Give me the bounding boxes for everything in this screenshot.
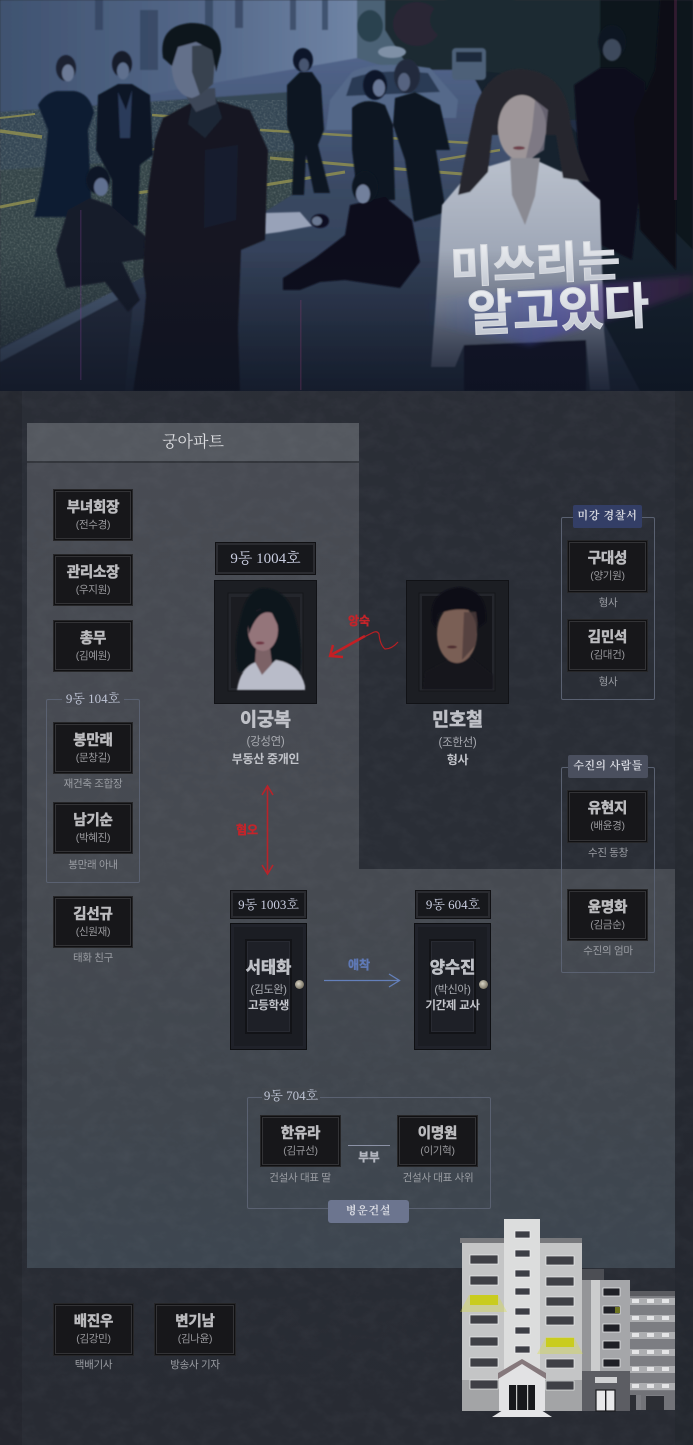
caption: 태화 친구: 태화 친구 bbox=[73, 952, 113, 964]
role: 형사: 형사 bbox=[447, 753, 468, 767]
group label: 수진의 사람들: 수진의 사람들 bbox=[573, 760, 643, 772]
name card: 김민석: 김민석 bbox=[588, 630, 627, 646]
relation label: 앙숙: 앙숙 bbox=[348, 614, 370, 628]
group box: 9동 704호 bbox=[247, 1097, 491, 1209]
name card: 배진우: (김강민) bbox=[76, 1333, 111, 1345]
name card: 봉만래: (문창길) bbox=[76, 752, 110, 764]
portrait frame: 민호철 bbox=[406, 580, 509, 704]
actor name: 박신아: (박신아) bbox=[434, 984, 471, 996]
door: 서태화 bbox=[230, 923, 307, 1050]
company label: 병운건설 bbox=[328, 1200, 409, 1223]
name card: 변기남: (김나윤) bbox=[178, 1333, 212, 1345]
character name: 이궁복: 이궁복 bbox=[240, 709, 291, 730]
name card: 김선규: 김선규 bbox=[73, 907, 113, 923]
room plate: 9동 604호: 9동 604호 bbox=[426, 897, 480, 912]
group box: 미강 경찰서 bbox=[561, 517, 655, 700]
car bbox=[326, 46, 486, 130]
room plate: 9동 1003호 bbox=[230, 890, 307, 919]
name card: 이명원: (이기혁) bbox=[420, 1145, 455, 1157]
caption: 재건축 조합장: 재건축 조합장 bbox=[64, 778, 122, 790]
room plate: 9동 1003호: 9동 1003호 bbox=[238, 897, 299, 912]
name card: 남기순 bbox=[53, 802, 133, 854]
group label: 9동 104호: 9동 104호 bbox=[66, 691, 120, 706]
name card: 총무 bbox=[53, 620, 133, 672]
name card: 구대성: 구대성 bbox=[588, 551, 627, 567]
group label: 미강 경찰서: 미강 경찰서 bbox=[577, 510, 638, 522]
grass speckle bbox=[0, 100, 300, 360]
caption: 형사: 형사 bbox=[599, 597, 617, 609]
actor name: 조한선: (조한선) bbox=[439, 737, 476, 749]
door: 양수진 bbox=[414, 923, 491, 1050]
actor name: 김도완: (김도완) bbox=[250, 984, 287, 996]
group box: 수진의 사람들 bbox=[561, 767, 655, 973]
name card: 부녀회장: 부녀회장 bbox=[67, 500, 119, 516]
name card: 구대성 bbox=[567, 540, 648, 593]
caption: 건설사 대표 사위: 건설사 대표 사위 bbox=[403, 1172, 473, 1184]
name card: 변기남: 변기남 bbox=[175, 1314, 215, 1330]
apartment building illustration bbox=[460, 1219, 675, 1417]
red double arrow: 혐오 bbox=[261, 784, 274, 876]
couple line bbox=[348, 1145, 390, 1146]
name card: 배진우 bbox=[53, 1303, 134, 1356]
name card: 한유라: 한유라 bbox=[281, 1126, 320, 1142]
character name: 양수진: 양수진 bbox=[430, 959, 475, 977]
name card: 김선규 bbox=[53, 896, 133, 948]
group label: 미강 경찰서 bbox=[573, 505, 642, 528]
police tape bbox=[0, 114, 500, 207]
name card: 배진우: 배진우 bbox=[74, 1314, 113, 1330]
blue arrow: 애착 bbox=[324, 974, 400, 988]
glitch lines and bottom shade bbox=[0, 0, 693, 391]
name card: 총무: 총무 bbox=[80, 631, 106, 647]
room plate: 9동 1004호: 9동 1004호 bbox=[230, 551, 301, 567]
caption: 수진의 엄마: 수진의 엄마 bbox=[583, 945, 633, 957]
name card: 김민석 bbox=[567, 619, 648, 672]
name card: 이명원: 이명원 bbox=[418, 1126, 457, 1142]
name card: 봉만래: 봉만래 bbox=[73, 733, 113, 749]
name card: 봉만래 bbox=[53, 722, 133, 774]
name card: 윤명화: 윤명화 bbox=[588, 900, 627, 916]
panel heading: 궁아파트: 궁아파트 bbox=[162, 434, 224, 451]
name card: 관리소장: 관리소장 bbox=[67, 565, 119, 581]
name card: 부녀회장 bbox=[53, 489, 133, 541]
name card: 유현지 bbox=[567, 790, 648, 843]
lead woman bbox=[431, 69, 610, 391]
red arrow: 앙숙 bbox=[328, 631, 398, 658]
name card: 관리소장 bbox=[53, 554, 133, 606]
drama title logo bbox=[425, 237, 693, 345]
drama title logo: 미쓰리는 bbox=[449, 237, 621, 293]
name card: 구대성: (양기원) bbox=[590, 570, 625, 582]
drama title logo: 알고있다 bbox=[466, 280, 650, 342]
lead man bbox=[133, 23, 268, 391]
name card: 이명원 bbox=[397, 1115, 478, 1167]
hero poster illustration bbox=[0, 0, 693, 391]
company label: 병운건설: 병운건설 bbox=[346, 1205, 391, 1217]
character name: 서태화: 서태화 bbox=[246, 959, 291, 977]
name card: 변기남 bbox=[154, 1303, 236, 1356]
relation label: 애착: 애착 bbox=[348, 958, 370, 972]
name card: 김민석: (김대건) bbox=[590, 649, 625, 661]
portrait frame: 이궁복 bbox=[214, 580, 317, 704]
room plate: 9동 1004호 bbox=[215, 542, 316, 575]
background faces bbox=[56, 25, 626, 228]
name card: 부녀회장: (전수경) bbox=[76, 519, 110, 531]
name card: 김선규: (신원재) bbox=[76, 926, 110, 938]
character name: 민호철: 민호철 bbox=[432, 709, 483, 730]
name card: 남기순: (박혜진) bbox=[76, 832, 110, 844]
name card: 유현지: 유현지 bbox=[588, 801, 627, 817]
role: 고등학생: 고등학생 bbox=[248, 1000, 289, 1012]
group box: 9동 104호 bbox=[46, 699, 140, 883]
actor name: 강성연: (강성연) bbox=[247, 736, 284, 748]
caption: 건설사 대표 딸: 건설사 대표 딸 bbox=[269, 1172, 331, 1184]
caption: 형사: 형사 bbox=[599, 676, 617, 688]
role: 부동산 중개인: 부동산 중개인 bbox=[232, 752, 299, 766]
backdrop bbox=[0, 0, 693, 391]
relation label: 혐오: 혐오 bbox=[236, 823, 258, 837]
caption: 수진 동창: 수진 동창 bbox=[588, 847, 628, 859]
name card: 윤명화: (김금순) bbox=[590, 919, 625, 931]
name card: 윤명화 bbox=[567, 889, 648, 941]
caption: 봉만래 아내: 봉만래 아내 bbox=[68, 859, 118, 871]
caption: 방송사 기자: 방송사 기자 bbox=[170, 1359, 220, 1371]
name card: 유현지: (배윤경) bbox=[590, 820, 625, 832]
caption: 택배기사: 택배기사 bbox=[75, 1359, 112, 1371]
group label: 9동 704호: 9동 704호 bbox=[264, 1088, 318, 1103]
background figures bbox=[34, 0, 676, 312]
role: 기간제 교사: 기간제 교사 bbox=[425, 1000, 480, 1012]
name card: 총무: (김예원) bbox=[76, 650, 110, 662]
name card: 한유라: (김규선) bbox=[283, 1145, 318, 1157]
name card: 관리소장: (우지원) bbox=[76, 584, 110, 596]
name card: 남기순: 남기순 bbox=[73, 813, 113, 829]
group label: 수진의 사람들 bbox=[568, 755, 648, 778]
relation label: 부부: 부부 bbox=[358, 1152, 380, 1164]
name card: 한유라 bbox=[260, 1115, 341, 1167]
room plate: 9동 604호 bbox=[415, 890, 491, 919]
